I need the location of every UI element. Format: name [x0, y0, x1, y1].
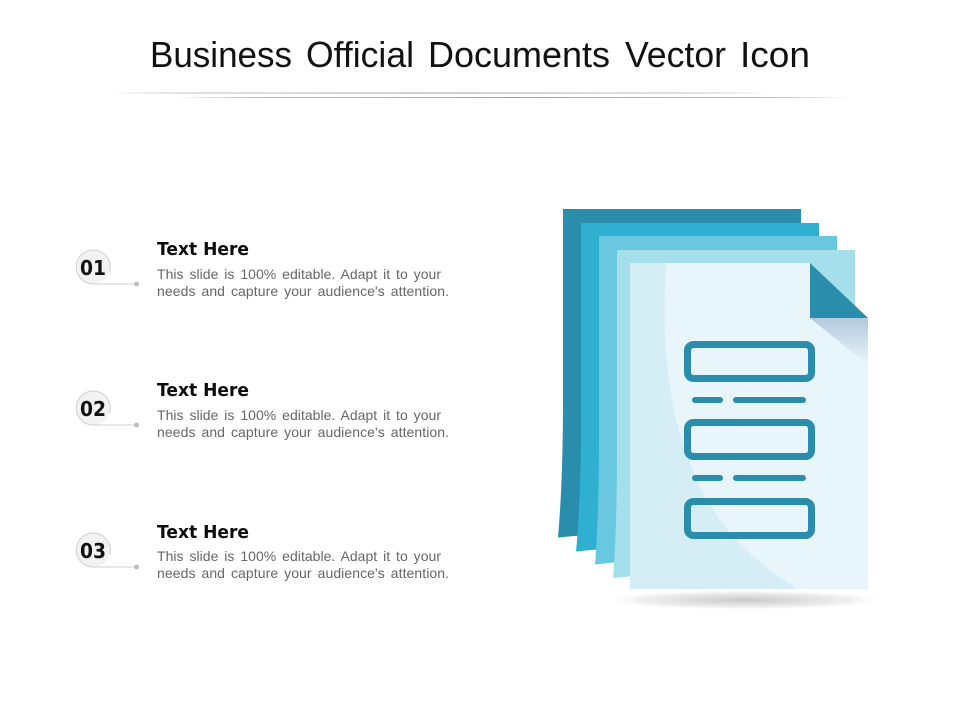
- description 01: needs and capture your audience's attention.: [157, 283, 449, 299]
- page fold: [810, 263, 868, 318]
- back sheet 1: [558, 209, 801, 538]
- title: Official: [306, 34, 414, 75]
- title underline: [110, 92, 850, 98]
- description 03: [157, 548, 449, 581]
- back sheet 2: [576, 223, 819, 552]
- description 03: needs and capture your audience's attention.: [157, 565, 449, 581]
- description 01: [157, 266, 449, 299]
- back sheet 3: [595, 236, 837, 564]
- heading 01: Text Here: [157, 239, 249, 260]
- description 01: This slide is 100% editable. Adapt it to your: [157, 266, 441, 282]
- icon: document stack: [558, 209, 890, 610]
- badge 01: [76, 250, 139, 286]
- text lines 2: [692, 475, 806, 481]
- badge 02: 02: [80, 397, 106, 421]
- description 03: This slide is 100% editable. Adapt it to your: [157, 548, 441, 564]
- description 02: [157, 407, 449, 440]
- heading 03: Text Here: [157, 522, 249, 543]
- ground shadow: [600, 590, 890, 610]
- heading 02: Text Here: [157, 380, 249, 401]
- description 02: needs and capture your audience's attention.: [157, 424, 449, 440]
- badge 01: 01: [80, 256, 106, 280]
- title: Icon: [740, 34, 810, 75]
- title: Business: [150, 34, 292, 75]
- form field 1: [688, 344, 812, 378]
- page highlight: [664, 263, 868, 589]
- title: Vector: [625, 34, 726, 75]
- back sheet 4: [613, 250, 855, 578]
- title: [150, 34, 810, 75]
- fold shadow: [810, 318, 868, 365]
- item 03: [76, 522, 449, 581]
- form field 3: [688, 502, 812, 536]
- text lines 1: [692, 397, 806, 403]
- title: Documents: [428, 34, 610, 75]
- badge 02: [76, 391, 139, 428]
- badge 03: [76, 533, 139, 570]
- item 02: [76, 380, 449, 440]
- form field 2: [688, 422, 812, 456]
- badge 03: 03: [80, 539, 106, 563]
- item 01: [76, 239, 449, 299]
- description 02: This slide is 100% editable. Adapt it to your: [157, 407, 441, 423]
- front page: [630, 263, 868, 589]
